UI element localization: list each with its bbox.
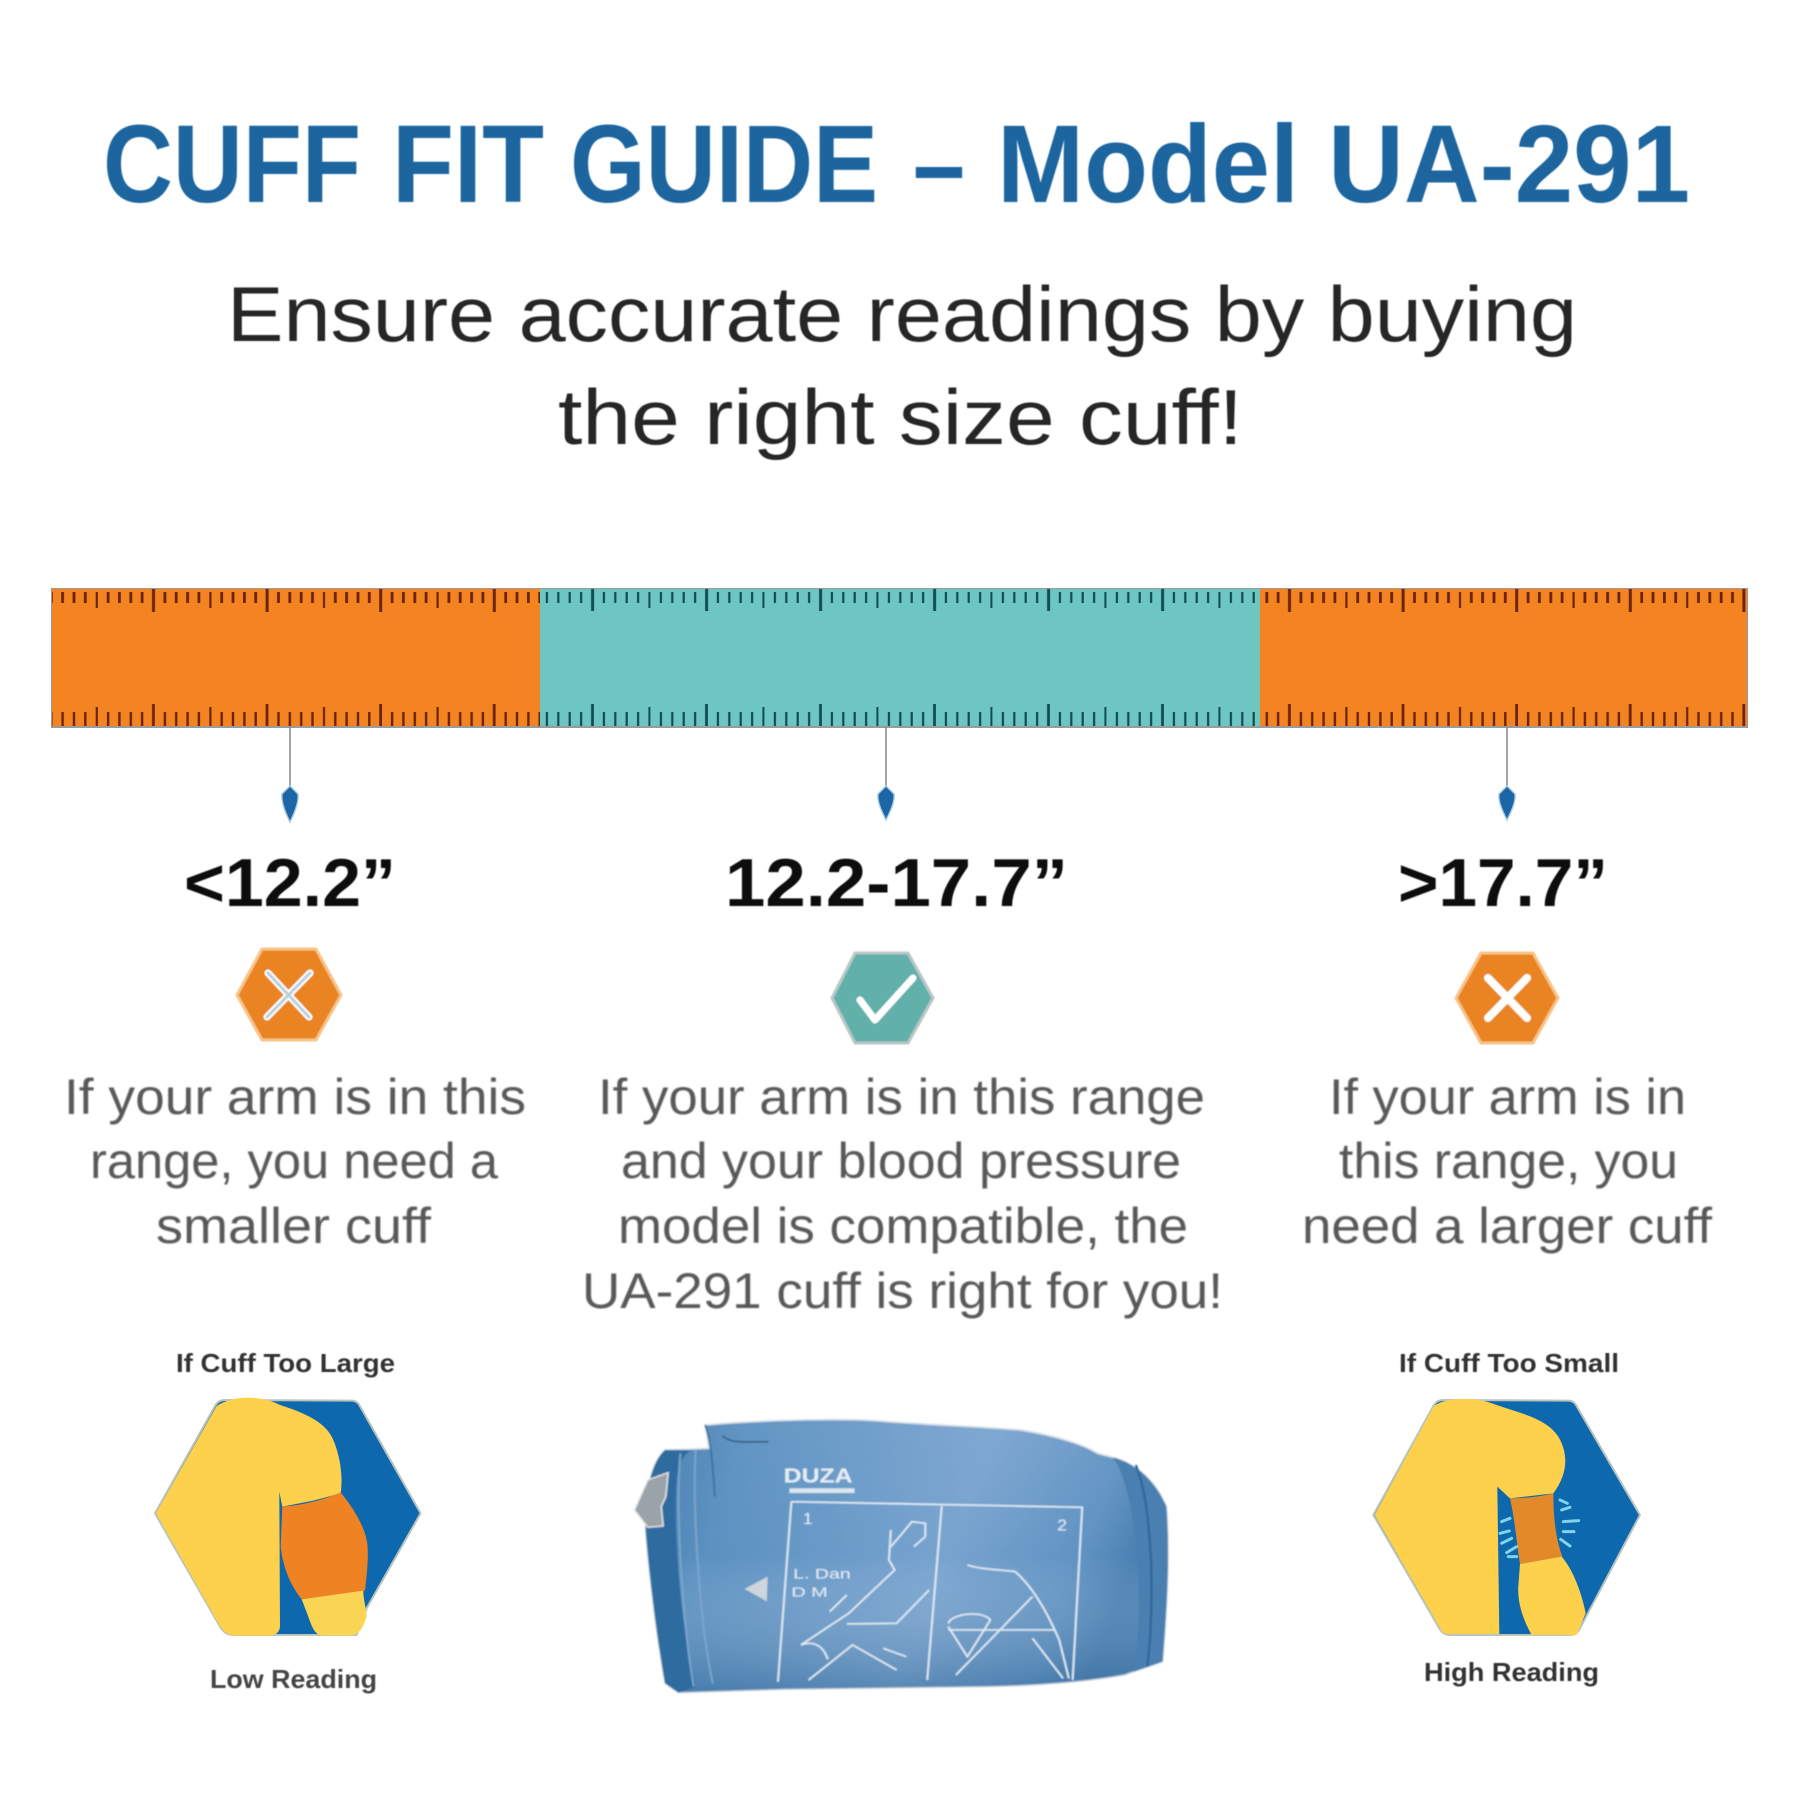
illustration: folded blood pressure cuff [634, 1420, 1168, 1693]
text block: left column [64, 1069, 526, 1254]
title: – [913, 103, 965, 226]
illustration: cuff too small [1373, 1399, 1640, 1635]
subtitle: the right size cuff! [558, 373, 1243, 461]
squeeze marks [1500, 1500, 1579, 1557]
arrow: left [282, 727, 298, 822]
text block: centre column: UA-291 cuff is right for you! [582, 1263, 1223, 1319]
title: GUIDE [570, 103, 878, 226]
illustration: cuff too large [155, 1398, 421, 1636]
illustration: folded blood pressure cuff: D M [791, 1586, 828, 1599]
illustration: folded blood pressure cuff: L. Dan [793, 1566, 851, 1582]
label: if cuff too small: If Cuff Too Small [1399, 1348, 1619, 1378]
text block: centre column: If your arm is in this range [598, 1069, 1205, 1125]
cuff body [646, 1420, 1168, 1693]
cuff panel numbers: 1 [803, 1511, 813, 1528]
subtitle: Ensure accurate readings by buying [227, 270, 1577, 358]
text block: centre column: model is compatible, the [618, 1198, 1188, 1254]
label: if cuff too large: If Cuff Too Large [176, 1348, 395, 1378]
label: low reading: Low Reading [210, 1664, 377, 1694]
illustration: folded blood pressure cuff: 2 [1057, 1518, 1067, 1534]
text block: left column: range, you need a [90, 1133, 498, 1189]
range label: under 12.2: <12.2” [184, 845, 396, 921]
subtitle [227, 270, 1577, 461]
text block: right column: need a larger cuff [1302, 1198, 1712, 1254]
ruler segment: too small range [52, 589, 540, 726]
title: Model [997, 103, 1299, 226]
range label: 12.2 to 17.7: 12.2-17.7” [725, 845, 1068, 921]
text block: right column [1302, 1069, 1712, 1254]
label: high reading: High Reading [1424, 1657, 1599, 1687]
arrow: right [1499, 727, 1515, 820]
text block: left column: If your arm is in this [64, 1069, 526, 1125]
ruler bar [51, 588, 1748, 728]
icon: teal hexagon check [832, 953, 933, 1043]
text block: right column: this range, you [1339, 1133, 1678, 1189]
text block: centre column [582, 1069, 1223, 1319]
text block: right column: If your arm is in [1329, 1069, 1686, 1125]
ruler segment: correct range [540, 589, 1260, 726]
title: UA-291 [1328, 103, 1690, 226]
icon: orange hexagon cross left [237, 949, 341, 1040]
icon: orange hexagon cross right [1456, 953, 1558, 1043]
cuff instruction panels [778, 1502, 1082, 1682]
ruler segment: too large range [1260, 589, 1747, 726]
title: CUFF [103, 103, 361, 226]
arrow: centre [878, 727, 894, 820]
text block: centre column: and your blood pressure [621, 1133, 1181, 1189]
title [103, 103, 1690, 226]
cuff brand text: DUZA [784, 1464, 853, 1487]
title: FIT [392, 103, 544, 226]
range label: over 17.7: >17.7” [1398, 845, 1608, 921]
cuff triangle marker [745, 1577, 768, 1601]
cuff strap [634, 1473, 668, 1527]
cuff left roll [646, 1450, 696, 1693]
text block: left column: smaller cuff [156, 1198, 431, 1254]
